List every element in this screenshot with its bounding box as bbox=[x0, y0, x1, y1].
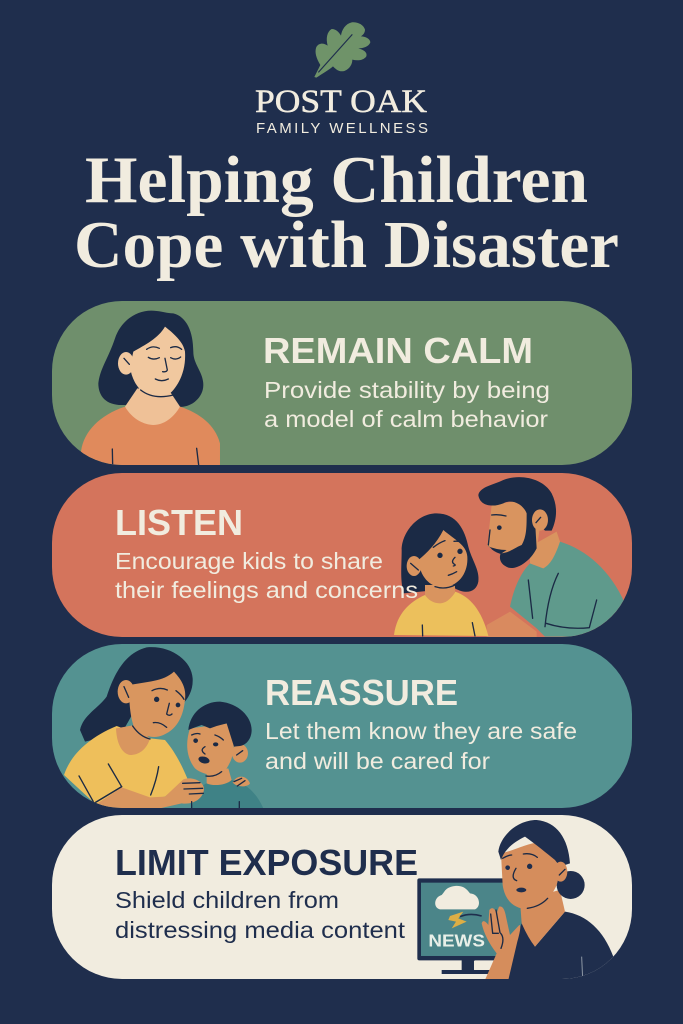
title: Helping Children bbox=[85, 143, 588, 217]
logo tagline: FAMILY WELLNESS bbox=[256, 120, 428, 137]
logo bbox=[255, 22, 428, 137]
illustration: father and daughter bbox=[394, 477, 625, 638]
body text: their feelings and concerns bbox=[115, 577, 418, 603]
heading: REMAIN CALM bbox=[263, 330, 533, 371]
body text: Provide stability by being bbox=[264, 377, 550, 403]
panel: reassure bbox=[52, 644, 632, 808]
body text: Let them know they are safe bbox=[265, 718, 577, 744]
panel: listen bbox=[52, 473, 632, 638]
panel: remain calm bbox=[52, 301, 632, 467]
icon: television with news bbox=[417, 878, 524, 974]
body text: and will be cared for bbox=[265, 748, 490, 774]
body text: distressing media content bbox=[115, 917, 406, 943]
heading: LIMIT EXPOSURE bbox=[115, 842, 418, 883]
title: Cope with Disaster bbox=[74, 208, 619, 282]
body text: Encourage kids to share bbox=[115, 548, 383, 574]
logo name: POST OAK bbox=[255, 84, 427, 120]
body text: Shield children from bbox=[115, 887, 339, 913]
body text: a model of calm behavior bbox=[264, 406, 548, 432]
icon: television with news: NEWS bbox=[428, 931, 485, 951]
panel: limit exposure bbox=[52, 815, 632, 982]
illustration: woman blocking news on television bbox=[417, 820, 627, 982]
icon: oak leaf bbox=[314, 22, 370, 78]
illustration: calm woman bbox=[81, 311, 220, 467]
title bbox=[74, 143, 619, 282]
heading: LISTEN bbox=[115, 502, 243, 543]
heading: REASSURE bbox=[265, 672, 458, 713]
icon: raised hand bbox=[482, 906, 520, 980]
illustration: mother and son bbox=[64, 647, 263, 808]
